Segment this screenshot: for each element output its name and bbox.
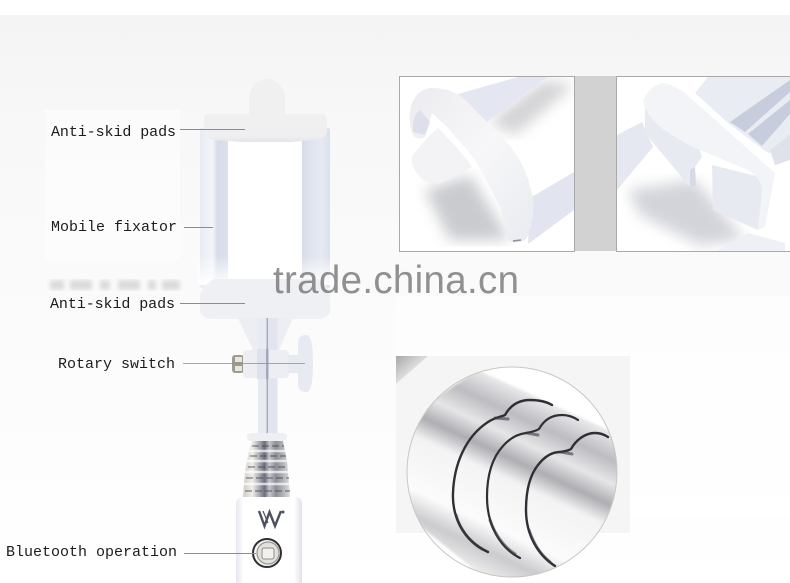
label: anti-skid pads top: Anti-skid pads bbox=[51, 124, 176, 141]
collar bbox=[247, 433, 287, 441]
rear rail bbox=[458, 77, 547, 122]
product: selfie stick bbox=[198, 79, 332, 583]
phone clamp bbox=[198, 79, 332, 319]
rotary switch bbox=[232, 335, 313, 392]
back mechanism bbox=[695, 77, 790, 153]
photo: clamp detail right bbox=[616, 76, 790, 252]
logo bbox=[259, 510, 284, 526]
metal spring bbox=[243, 441, 290, 497]
watermark: trade.china.cn bbox=[273, 259, 519, 302]
handle base bbox=[236, 497, 302, 583]
panel: metal tube detail bbox=[395, 356, 630, 583]
bluetooth button bbox=[253, 539, 281, 567]
label: rotary switch: Rotary switch bbox=[58, 356, 175, 373]
gray divider panel bbox=[575, 76, 616, 251]
mount prongs bbox=[238, 318, 293, 435]
photo: clamp detail left bbox=[400, 76, 574, 252]
knob bbox=[288, 335, 313, 392]
soft shadows bbox=[628, 180, 745, 245]
pad top band bbox=[643, 83, 775, 230]
tab bbox=[412, 128, 472, 184]
rail bbox=[617, 122, 653, 190]
label: anti-skid pads bottom: Anti-skid pads bbox=[50, 296, 175, 313]
groove shading bbox=[456, 418, 572, 562]
pad arch bbox=[410, 88, 534, 242]
tube sections bbox=[408, 372, 616, 576]
bottom anti-skid pad bbox=[200, 279, 330, 319]
soft shadows bbox=[425, 175, 510, 240]
label: bluetooth operation: Bluetooth operation bbox=[6, 544, 177, 561]
screw bbox=[232, 355, 244, 373]
hub bbox=[243, 350, 289, 378]
leader lines bbox=[180, 130, 305, 554]
top anti-skid pad bbox=[204, 79, 327, 142]
foot bbox=[717, 233, 785, 251]
pad legs bbox=[645, 108, 702, 187]
front rail bbox=[528, 172, 574, 244]
label: mobile fixator: Mobile fixator bbox=[51, 219, 177, 236]
section grooves bbox=[453, 400, 608, 566]
clamp arms bbox=[198, 128, 332, 288]
labels bbox=[6, 124, 177, 561]
